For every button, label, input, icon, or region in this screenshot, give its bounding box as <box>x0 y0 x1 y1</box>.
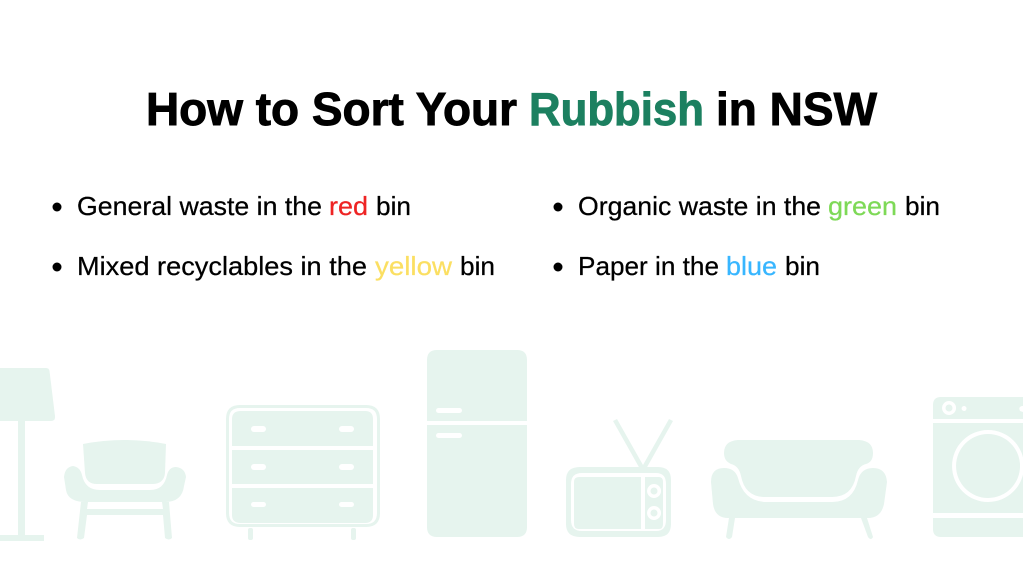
title <box>146 83 878 135</box>
icon: television <box>566 419 673 537</box>
bullet: mixed recyclables <box>52 251 495 281</box>
icon: fridge <box>427 350 527 537</box>
icon: armchair <box>64 440 186 540</box>
icon: chest of drawers <box>226 405 380 540</box>
furniture silhouettes <box>0 350 1023 541</box>
bullet: paper: Paper in the <box>578 251 719 281</box>
title: Rubbish <box>529 83 704 135</box>
title: in NSW <box>716 83 878 135</box>
bullet: organic waste <box>554 191 940 221</box>
bullet: mixed recyclables: yellow <box>375 251 452 281</box>
bullet: organic waste: green <box>828 191 897 221</box>
bullet: organic waste: Organic waste in the <box>578 191 821 221</box>
bullet: mixed recyclables: bin <box>460 251 495 281</box>
bullet: mixed recyclables: Mixed recyclables in the <box>77 251 367 281</box>
title: How to Sort Your <box>146 83 517 135</box>
bullet: paper <box>554 251 820 281</box>
icon: sofa <box>711 440 887 539</box>
icon: floor lamp <box>0 368 55 541</box>
bullet: general waste <box>52 191 411 221</box>
icon: washing machine <box>933 397 1023 537</box>
bullet: paper: blue <box>726 251 777 281</box>
bullet: organic waste: bin <box>905 191 940 221</box>
bullet: general waste: General waste in the <box>77 191 322 221</box>
bullet: paper: bin <box>785 251 820 281</box>
bullet: general waste: red <box>329 191 368 221</box>
bullet: general waste: bin <box>376 191 411 221</box>
